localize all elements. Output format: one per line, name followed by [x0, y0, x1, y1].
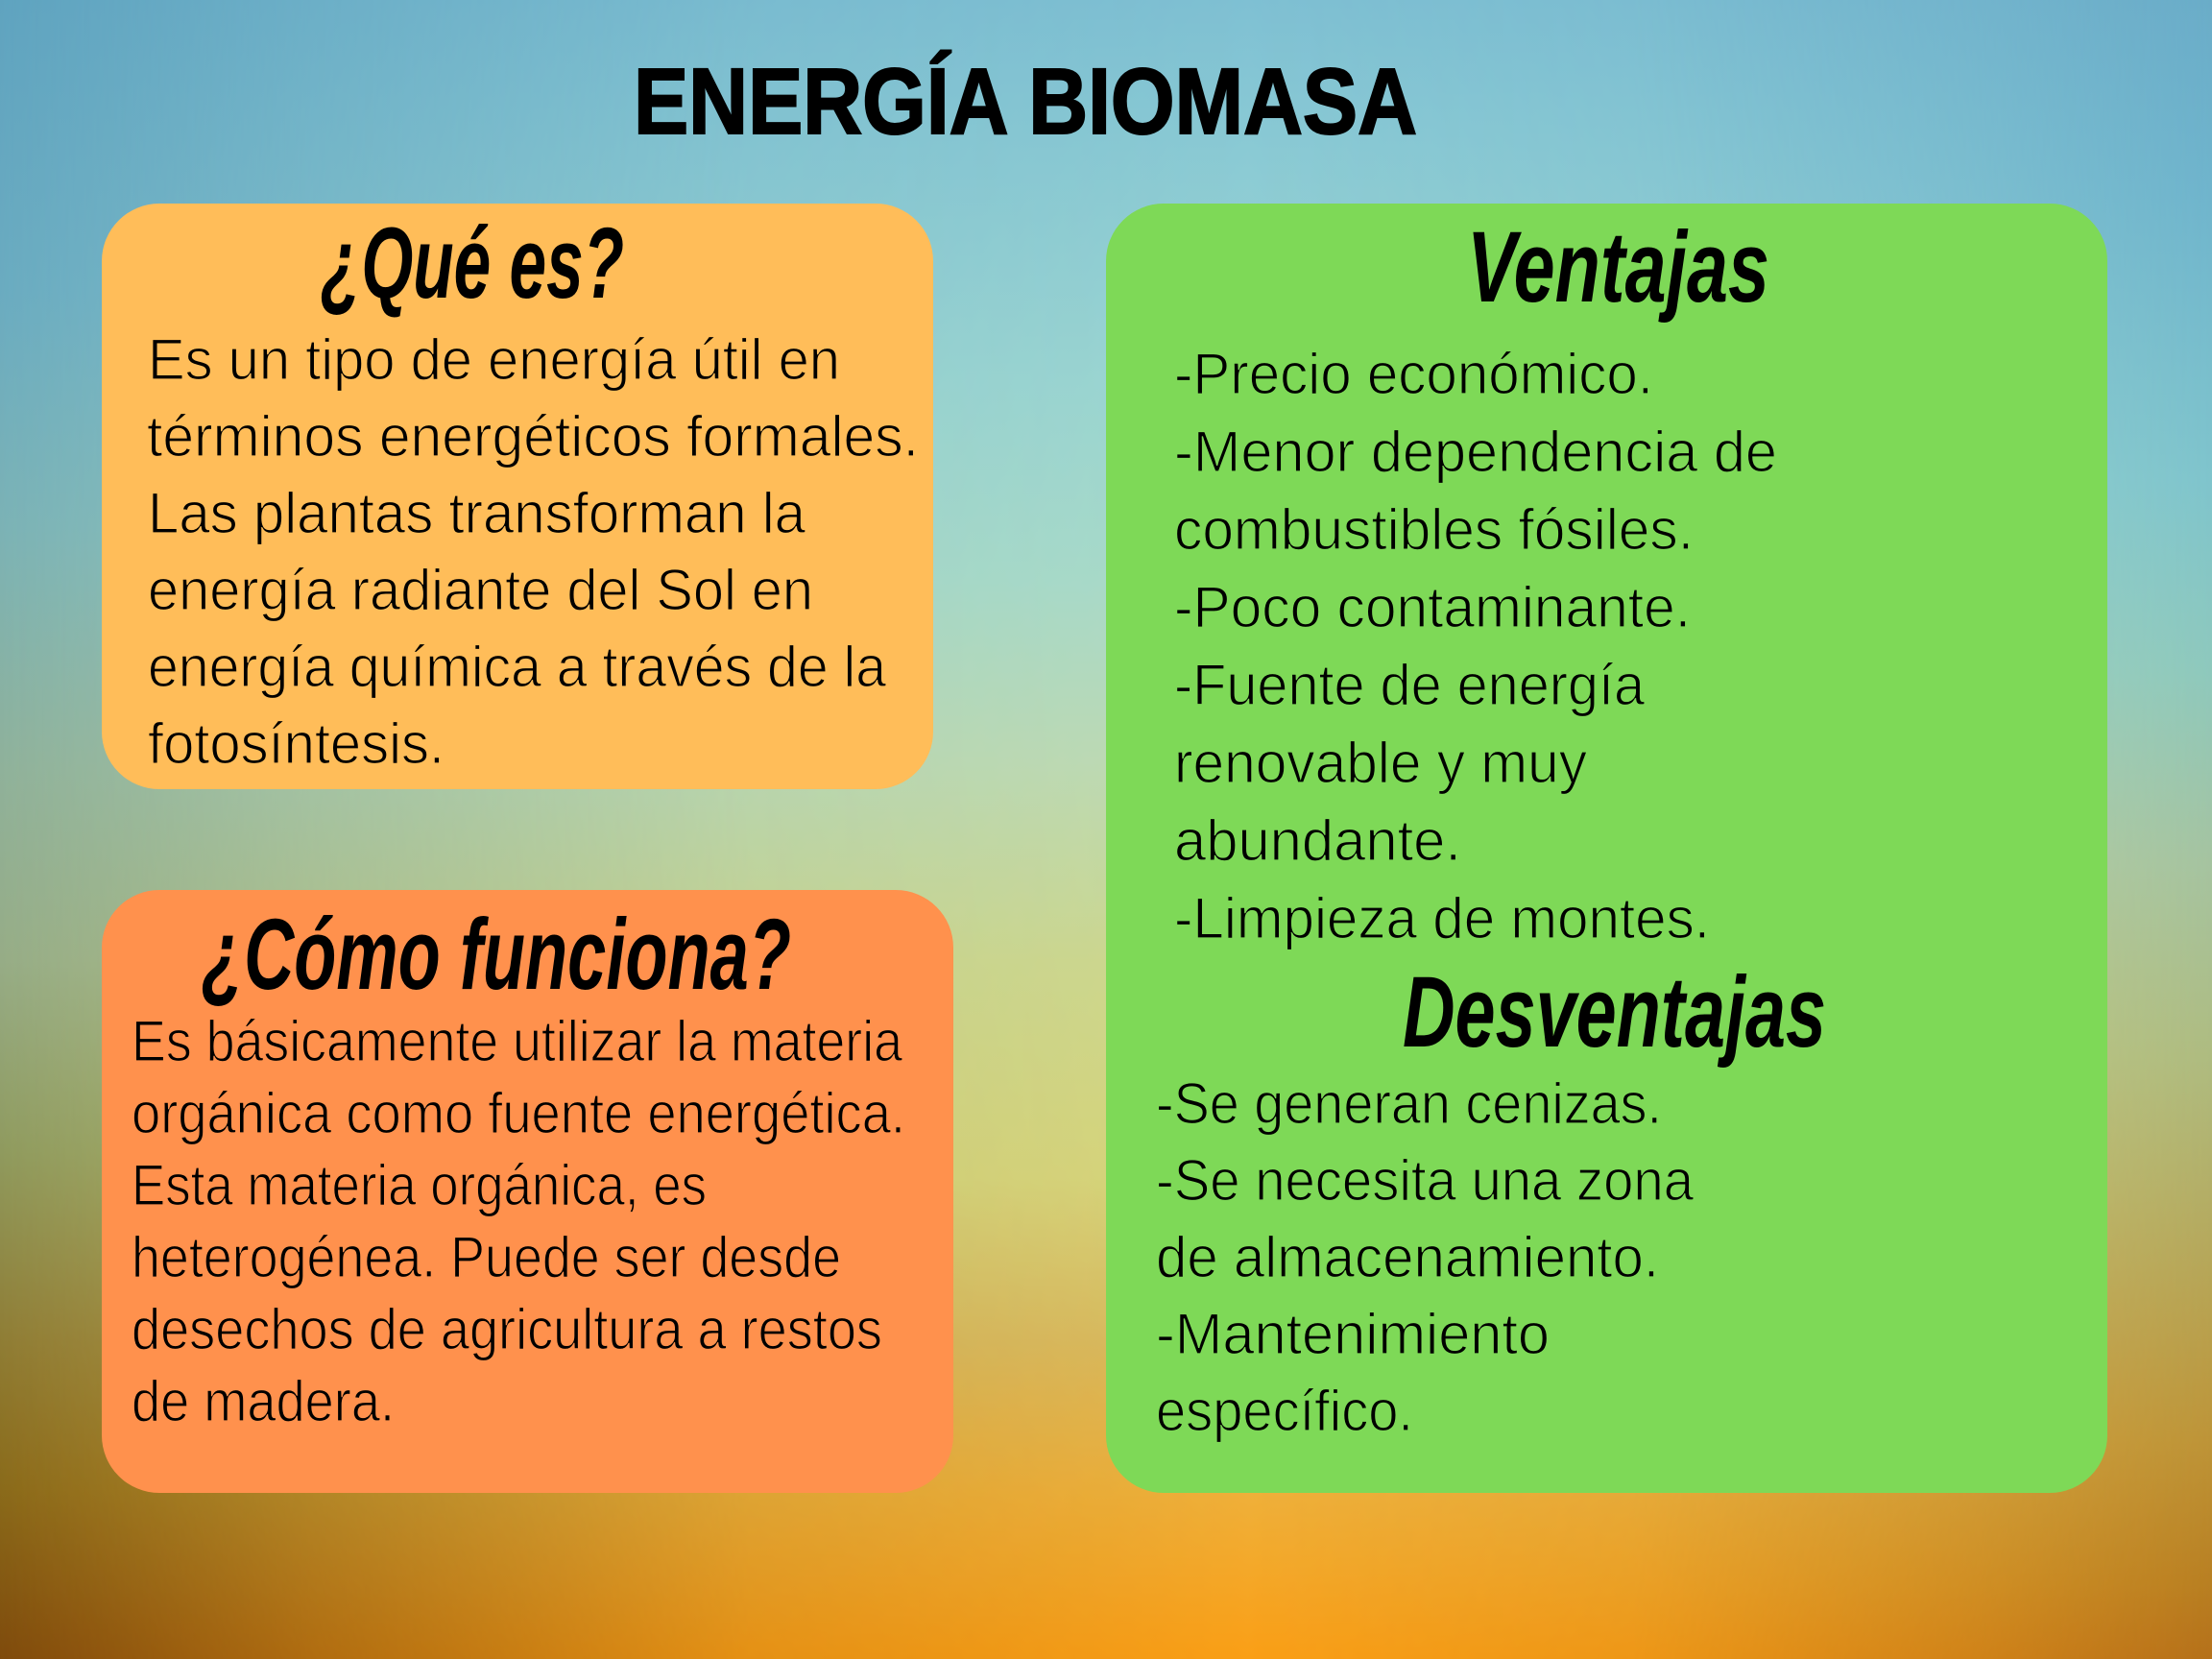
list: ventajas: combustibles fósiles. — [1174, 497, 1694, 562]
text block: cómo funciona: Esta materia orgánica, es — [132, 1153, 707, 1217]
list: ventajas: renovable y muy — [1174, 731, 1587, 795]
heading: cómo funciona: ¿Cómo funciona? — [202, 899, 791, 1011]
title: ENERGÍA BIOMASA — [634, 49, 1417, 154]
list: ventajas: -Menor dependencia de — [1174, 420, 1777, 484]
list: desventajas: -Se necesita una zona — [1156, 1148, 1695, 1213]
text block: qué es: Las plantas transforman la — [148, 481, 806, 545]
list: desventajas: de almacenamiento. — [1156, 1225, 1659, 1289]
text block: qué es: términos energéticos formales. — [147, 404, 919, 469]
text block: cómo funciona — [132, 1009, 905, 1433]
panel: cómo funciona — [102, 890, 953, 1493]
list: desventajas: -Se generan cenizas. — [1156, 1071, 1662, 1136]
panel background: ventajas y desventajas — [1106, 204, 2107, 1493]
panel: qué es — [102, 204, 933, 789]
text block: qué es: energía radiante del Sol en — [148, 558, 813, 622]
text block: cómo funciona: orgánica como fuente energética. — [132, 1081, 905, 1145]
heading: desventajas: Desventajas — [1403, 956, 1826, 1069]
text block: cómo funciona: Es básicamente utilizar la materia — [132, 1009, 903, 1073]
list: ventajas: -Limpieza de montes. — [1174, 886, 1710, 950]
panel background: qué es — [102, 204, 933, 789]
list: ventajas — [1174, 342, 1777, 950]
panel: ventajas y desventajas — [1106, 204, 2107, 1493]
heading: ventajas: Ventajas — [1467, 211, 1769, 324]
text block: cómo funciona: heterogénea. Puede ser desde — [132, 1225, 841, 1289]
text block: qué es: Es un tipo de energía útil en — [148, 327, 840, 392]
text block: qué es — [147, 327, 919, 776]
list: ventajas: -Precio económico. — [1174, 342, 1653, 406]
text block: qué es: energía química a través de la — [148, 635, 887, 699]
list: desventajas: -Mantenimiento — [1156, 1302, 1550, 1366]
text block: cómo funciona: desechos de agricultura a restos — [132, 1297, 882, 1361]
panel background: cómo funciona — [102, 890, 953, 1493]
list: ventajas: -Fuente de energía — [1174, 653, 1646, 717]
text block: cómo funciona: de madera. — [132, 1369, 395, 1433]
text block: qué es: fotosíntesis. — [148, 711, 445, 776]
list: desventajas — [1156, 1071, 1695, 1443]
list: ventajas: -Poco contaminante. — [1174, 575, 1691, 639]
list: desventajas: específico. — [1156, 1379, 1413, 1443]
list: ventajas: abundante. — [1174, 808, 1461, 873]
heading: qué es: ¿Qué es? — [321, 207, 624, 320]
